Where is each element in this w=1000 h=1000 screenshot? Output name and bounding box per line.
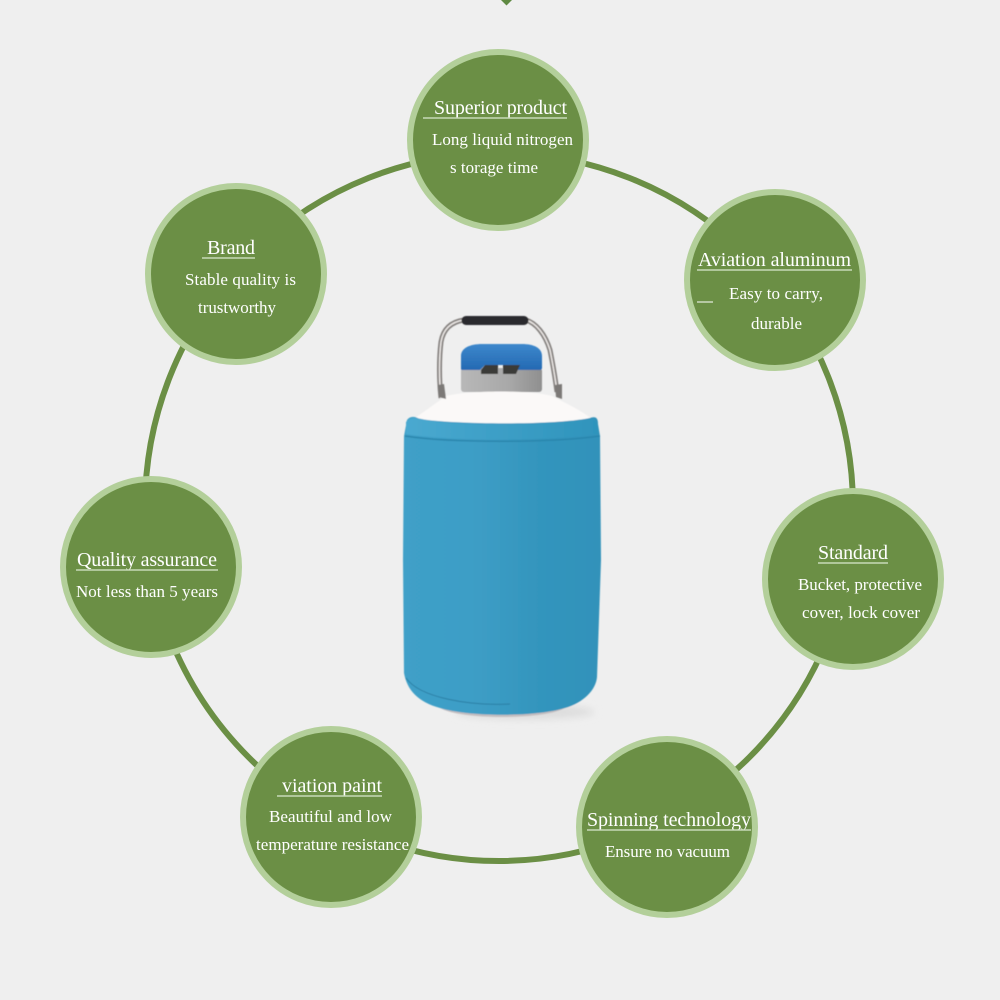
node: Superior product <box>410 52 586 228</box>
node: viation paint: temperature resistance <box>256 835 409 854</box>
node: viation paint <box>243 729 419 905</box>
node: Brand: trustworthy <box>198 298 276 317</box>
heading: Aviation aluminum: Aviation aluminum <box>698 249 851 271</box>
text: Long liquid nitrogen storage time: Long liquid nitrogen <box>432 130 574 149</box>
text: Stable quality is trustworthy: Stable quality is <box>185 270 296 289</box>
heading: Spinning technology: Spinning technology <box>587 809 751 831</box>
text: Easy to carry, durable: Easy to carry, <box>729 284 823 303</box>
cover bottom seam <box>406 678 510 704</box>
lid latch <box>481 365 520 374</box>
text: Not less than 5 years: Not less than 5 years <box>76 582 218 601</box>
heading: Superior product: Superior product <box>434 97 567 119</box>
text: Ensure no vacuum: Ensure no vacuum <box>605 842 730 861</box>
cover gathered top band <box>406 418 598 439</box>
text: Beautiful and low temperature resistance: Beautiful and low <box>269 807 393 826</box>
bottle base <box>440 708 565 717</box>
cover drawstring hem <box>405 436 600 441</box>
bottle handle <box>440 320 557 398</box>
heading: viation paint: viation paint <box>282 775 382 797</box>
node: Standard <box>765 491 941 667</box>
floor shadow <box>455 705 595 719</box>
connecting ring <box>145 153 853 861</box>
heading: Quality assurance: Quality assurance <box>77 549 217 571</box>
side clips <box>438 384 562 399</box>
node: Spinning technology <box>579 739 755 915</box>
node: Brand <box>148 186 324 362</box>
node: Superior product: s torage time <box>450 158 538 177</box>
node: Quality assurance <box>63 479 239 655</box>
node: Aviation aluminum: durable <box>751 314 802 333</box>
top arrow marker <box>501 0 512 6</box>
bottle shoulder <box>412 392 597 430</box>
heading: Standard: Standard <box>818 542 888 564</box>
node: Aviation aluminum <box>687 192 863 368</box>
bottle neck <box>461 368 542 392</box>
heading: Brand: Brand <box>207 237 255 259</box>
protective cover body <box>403 417 601 715</box>
bottle illustration <box>403 320 601 719</box>
bottle lid <box>461 344 542 370</box>
text: Bucket, protective cover, lock cover: Bucket, protective <box>798 575 922 594</box>
node: Standard: cover, lock cover <box>802 603 920 622</box>
